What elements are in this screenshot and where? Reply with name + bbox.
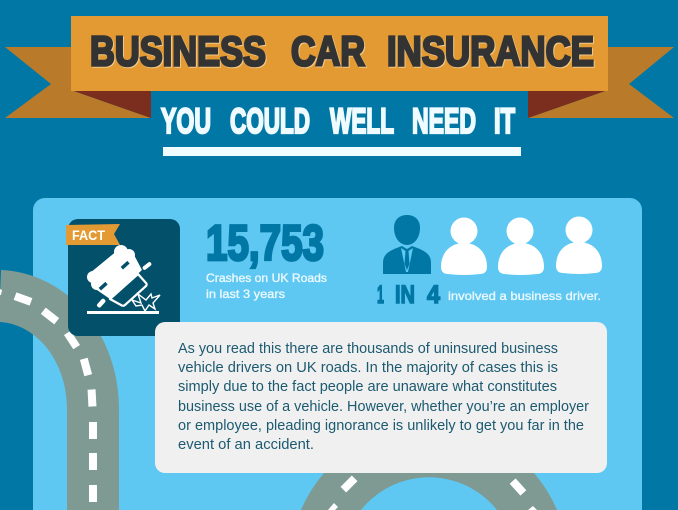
stat: crashes: 15,753 [206, 215, 324, 271]
body text: As you read this there are thousands of uninsured business [178, 341, 558, 357]
subtitle: IT [494, 102, 515, 141]
subtitle: WELL [330, 102, 394, 141]
subtitle [161, 102, 515, 141]
icon: business person [383, 215, 431, 274]
subtitle: NEED [412, 102, 476, 141]
banner ribbon [5, 16, 674, 118]
stat: one in four: IN [395, 281, 415, 309]
body text: event of an accident. [178, 437, 314, 453]
stat: crashes [206, 215, 327, 301]
panel: fact badge [66, 219, 180, 336]
stat: one in four: 4 [427, 281, 440, 309]
title: CAR [291, 28, 365, 74]
body text: or employee, pleading ignorance is unlikely to get you far in the [178, 418, 584, 434]
icons: three white people [441, 216, 602, 275]
road: bottom curve [301, 425, 557, 510]
fact flag: FACT [72, 227, 105, 243]
stat: crashes: in last 3 years [206, 287, 285, 301]
stat: crashes: Crashes on UK Roads [206, 271, 327, 285]
stat: one in four [377, 281, 601, 309]
panel: body text [155, 322, 607, 473]
stat: one in four: involved a business driver. [448, 289, 601, 303]
stat: one in four: 1 [377, 281, 384, 309]
subtitle: COULD [230, 102, 310, 141]
subtitle: YOU [161, 102, 211, 141]
body text: simply due to the fact people are unaware what constitutes [178, 379, 557, 395]
body text [178, 341, 589, 453]
panel: fact background [33, 198, 642, 510]
body text: business use of a vehicle. However, whether you’re an employer [178, 399, 589, 415]
title: INSURANCE [387, 28, 594, 74]
body text: vehicle drivers on UK roads. In the majority of cases this is [178, 360, 558, 376]
road: left curve [0, 289, 97, 510]
icon: overturned car [87, 245, 160, 314]
title [90, 28, 594, 74]
title: BUSINESS [90, 28, 266, 74]
subtitle underline [163, 147, 521, 156]
